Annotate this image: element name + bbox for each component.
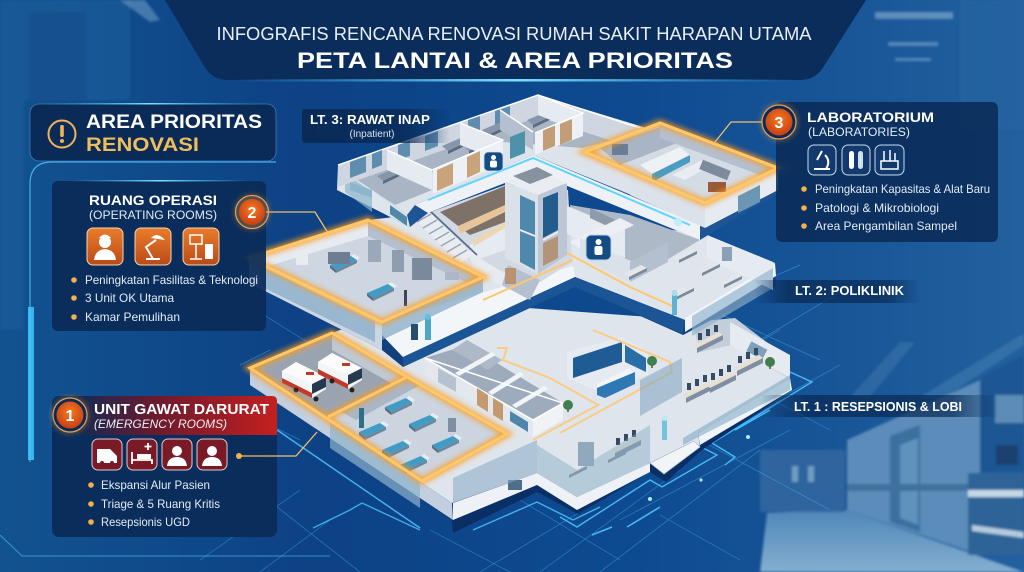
badge 1 <box>51 396 89 434</box>
polyclinic rooms <box>565 205 773 336</box>
white balcony band with cyan line <box>415 155 700 240</box>
heading accent: RENOVASI <box>86 135 199 156</box>
bullet list: Peningkatan Fasilitas & Teknologi <box>85 273 258 287</box>
title line 2: PETA LANTAI & AREA PRIORITAS <box>297 48 733 73</box>
bullet list <box>801 182 990 233</box>
panel title: RUANG OPERASI <box>89 192 217 208</box>
bullet list <box>71 273 258 324</box>
floor surface <box>250 300 790 503</box>
panel title: LABORATORIUM <box>807 109 934 125</box>
header banner <box>165 0 866 82</box>
reception desk <box>567 337 657 398</box>
red title banner <box>72 396 277 435</box>
heading panel: area prioritas renovasi <box>30 103 276 161</box>
emergency room <box>328 377 507 481</box>
badge 3 with connector <box>715 103 798 142</box>
bullet list: Triage & 5 Ruang Kritis <box>101 497 220 511</box>
bullet list: Area Pengambilan Sampel <box>815 219 957 233</box>
rear wall and room floors <box>345 105 630 205</box>
floor label: lt. 3 <box>302 109 450 143</box>
badge 2 with connector: 2 <box>248 205 257 222</box>
operating theatre <box>249 220 483 340</box>
laboratory room <box>585 123 778 228</box>
beds floor 3 <box>350 109 557 198</box>
floor label: lt. 1 <box>760 395 1000 417</box>
icon: exclamation <box>48 120 76 148</box>
windows <box>350 105 565 178</box>
corridor line floor 1 <box>497 348 598 440</box>
small consult rooms <box>425 340 573 437</box>
icon: surgeon <box>87 228 123 265</box>
icon: test tubes <box>842 145 870 175</box>
panel title: UNIT GAWAT DARURAT <box>94 401 269 418</box>
panel subtitle: (OPERATING ROOMS) <box>89 210 217 222</box>
map pin person icon floor 3 <box>484 152 503 171</box>
priority outline: emergency <box>250 333 507 481</box>
mid corridor zone with rooms <box>428 185 572 300</box>
waiting lounge <box>640 318 790 445</box>
priority outline: laboratories <box>585 123 778 203</box>
elevator tower <box>505 167 567 274</box>
priority outline: operating rooms <box>249 220 483 322</box>
badge 1: 1 <box>66 408 75 425</box>
bullet list: Patologi & Mikrobiologi <box>815 201 939 215</box>
floor 1: reception and lobby <box>250 300 792 533</box>
connector from emergency panel <box>236 432 317 459</box>
icon: nurse <box>162 439 192 470</box>
icon: lab bottles <box>875 145 904 175</box>
title line 1: INFOGRAFIS RENCANA RENOVASI RUMAH SAKIT HARAPAN UTAMA <box>216 24 812 44</box>
bullet list: Kamar Pemulihan <box>85 310 180 324</box>
floor label: lt. 3: (Inpatient) <box>349 129 395 140</box>
slab underside <box>249 220 776 367</box>
panel subtitle: (LABORATORIES) <box>808 127 910 139</box>
front wall <box>249 258 382 350</box>
corridor line floor 2 <box>483 253 672 306</box>
icon: monitor equipment <box>183 228 219 265</box>
bullet list: Ekspansi Alur Pasien <box>101 478 210 492</box>
floor label: lt. 2: LT. 2: POLIKLINIK <box>795 284 904 298</box>
icon: surgical lamp <box>135 228 171 265</box>
floor label: lt. 2 <box>755 280 920 303</box>
bullet list: Peningkatan Kapasitas & Alat Baru <box>815 182 990 196</box>
panel: unit gawat darurat <box>52 396 277 537</box>
icon: ambulance <box>92 439 122 470</box>
staff figures <box>411 314 431 340</box>
bullet list <box>88 478 220 529</box>
floor 3: rawat inap <box>337 95 778 240</box>
floor grid circuit lines <box>200 265 860 572</box>
left frame line <box>0 162 330 556</box>
icon: microscope <box>808 145 836 175</box>
bullet list: Resepsionis UGD <box>101 515 190 529</box>
bullet list: 3 Unit OK Utama <box>85 291 174 305</box>
floor 2: poliklinik <box>249 185 776 367</box>
panel: ruang operasi <box>52 180 266 331</box>
panel: laboratorium <box>776 102 998 242</box>
heading text: AREA PRIORITAS <box>86 112 262 133</box>
entrance steps <box>650 441 700 474</box>
floor surface <box>249 205 775 357</box>
icon: hospital bed <box>127 439 157 470</box>
slab underside <box>250 370 792 533</box>
floor label: lt. 1: LT. 1 : RESEPSIONIS & LOBI <box>794 400 962 414</box>
icon: doctor <box>197 439 227 470</box>
front wall <box>250 368 453 520</box>
ambulance bay <box>250 333 407 417</box>
floor label: lt. 3: LT. 3: RAWAT INAP <box>310 113 430 127</box>
map pin person icon floor 2 <box>586 235 611 260</box>
badge 2 with connector <box>234 194 328 233</box>
lobby lower glass zone <box>453 415 668 503</box>
room divider walls <box>387 95 583 194</box>
slab and front wall <box>337 95 778 240</box>
badge 3 with connector: 3 <box>775 115 784 132</box>
stairs floor 3 to 2 <box>413 210 477 263</box>
panel subtitle: (EMERGENCY ROOMS) <box>94 419 227 431</box>
